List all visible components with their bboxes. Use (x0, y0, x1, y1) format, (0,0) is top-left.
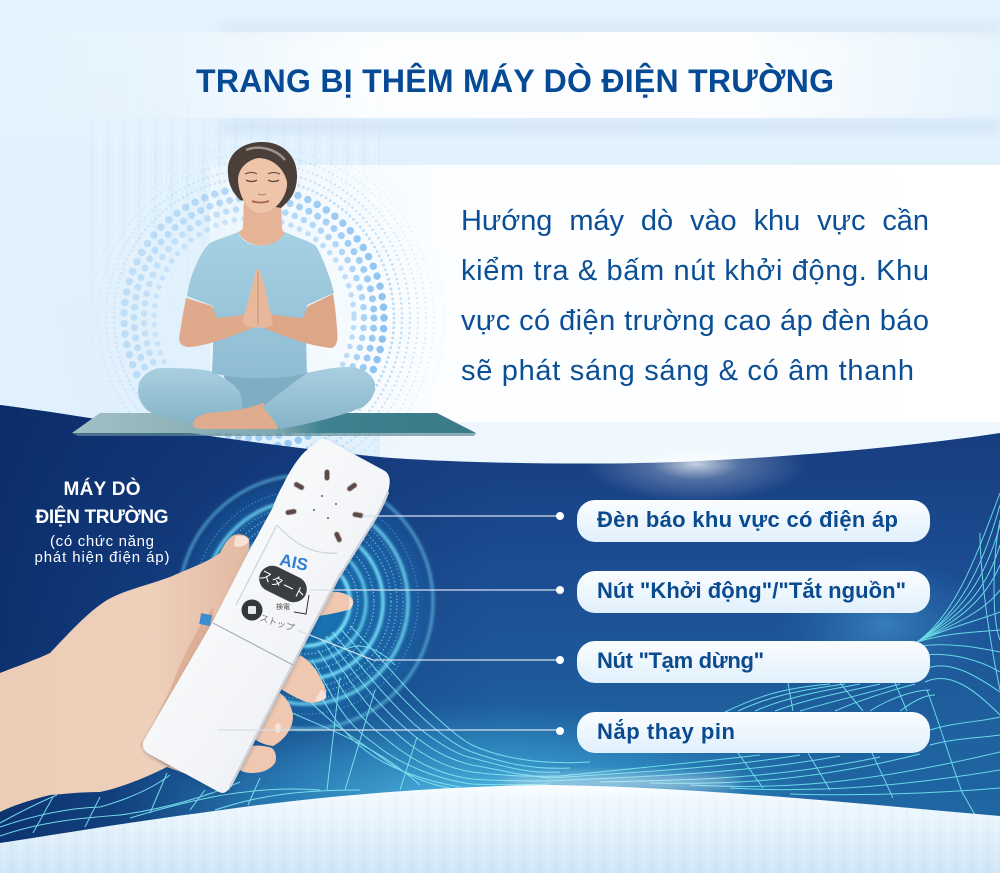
hand holding the device (0, 534, 353, 812)
wireframe mesh right (550, 493, 1000, 815)
leader lines (218, 516, 560, 730)
label: pause button (577, 641, 930, 683)
instruction paragraph: Hướng máy dò vào khu vực cần (461, 205, 929, 237)
device heading: (có chức năng (50, 533, 154, 550)
instruction paragraph (461, 205, 929, 387)
bracket and caption (276, 595, 309, 614)
field detector device (143, 439, 390, 793)
right arm (262, 294, 337, 348)
label: indicator light: Đèn báo khu vực có điện áp (597, 507, 898, 532)
yoga mat (72, 413, 476, 436)
hair (228, 142, 297, 208)
label: battery cover (577, 712, 930, 753)
praying hands (242, 268, 273, 328)
grey hair streak (246, 148, 285, 160)
label: pause button: Nút "Tạm dừng" (597, 648, 764, 673)
left arm (179, 298, 255, 347)
thumb and finger nails (234, 536, 353, 733)
center lap shadow (222, 372, 308, 415)
device heading: ĐIỆN TRƯỜNG (36, 506, 168, 528)
faceplate seams (213, 525, 337, 665)
title band (0, 22, 1000, 132)
halftone rings behind the person (88, 128, 444, 457)
concentric signal rings (174, 470, 438, 734)
background stripes (90, 160, 380, 170)
person meditating (138, 142, 375, 429)
closed eyes and mouth (245, 172, 280, 202)
stop caption: ストップ (258, 611, 296, 634)
leader dots (556, 512, 564, 735)
bracket and caption: 検電 (276, 602, 290, 612)
palm shadow (140, 607, 215, 768)
blue tag (199, 613, 212, 626)
label: battery cover: Nắp thay pin (597, 719, 735, 744)
device side edge (230, 492, 388, 787)
title: TRANG BỊ THÊM MÁY DÒ ĐIỆN TRƯỜNG (196, 63, 834, 99)
crossed right leg (263, 367, 375, 429)
text panel backdrop (210, 165, 1000, 467)
label: start / power button: Nút "Khởi động"/"Tắt nguồn" (597, 578, 906, 603)
wireframe mesh lower left (0, 626, 590, 836)
torso (187, 232, 334, 378)
label: indicator light (577, 500, 930, 542)
start button: スタート (257, 564, 310, 603)
AIS logo: AIS (278, 550, 310, 575)
device heading: MÁY DÒ (64, 478, 140, 500)
instruction paragraph: vực có điện trường cao áp đèn báo (461, 305, 929, 337)
crossed left leg (138, 368, 242, 424)
instruction paragraph: kiểm tra & bấm nút khởi động. Khu (461, 255, 929, 287)
device heading: phát hiện điện áp) (34, 549, 170, 566)
indicator lights (285, 470, 364, 543)
face (238, 158, 287, 213)
stop button (237, 595, 267, 625)
dark blue wave section (0, 405, 1000, 873)
label: start / power button (577, 571, 930, 613)
bottom light wave (0, 776, 1000, 873)
feet (193, 403, 278, 429)
instruction paragraph: sẽ phát sáng sáng & có âm thanh (461, 355, 914, 387)
speaker holes (313, 495, 337, 519)
neck (238, 198, 285, 246)
device heading (34, 478, 170, 566)
fingers (240, 592, 353, 773)
